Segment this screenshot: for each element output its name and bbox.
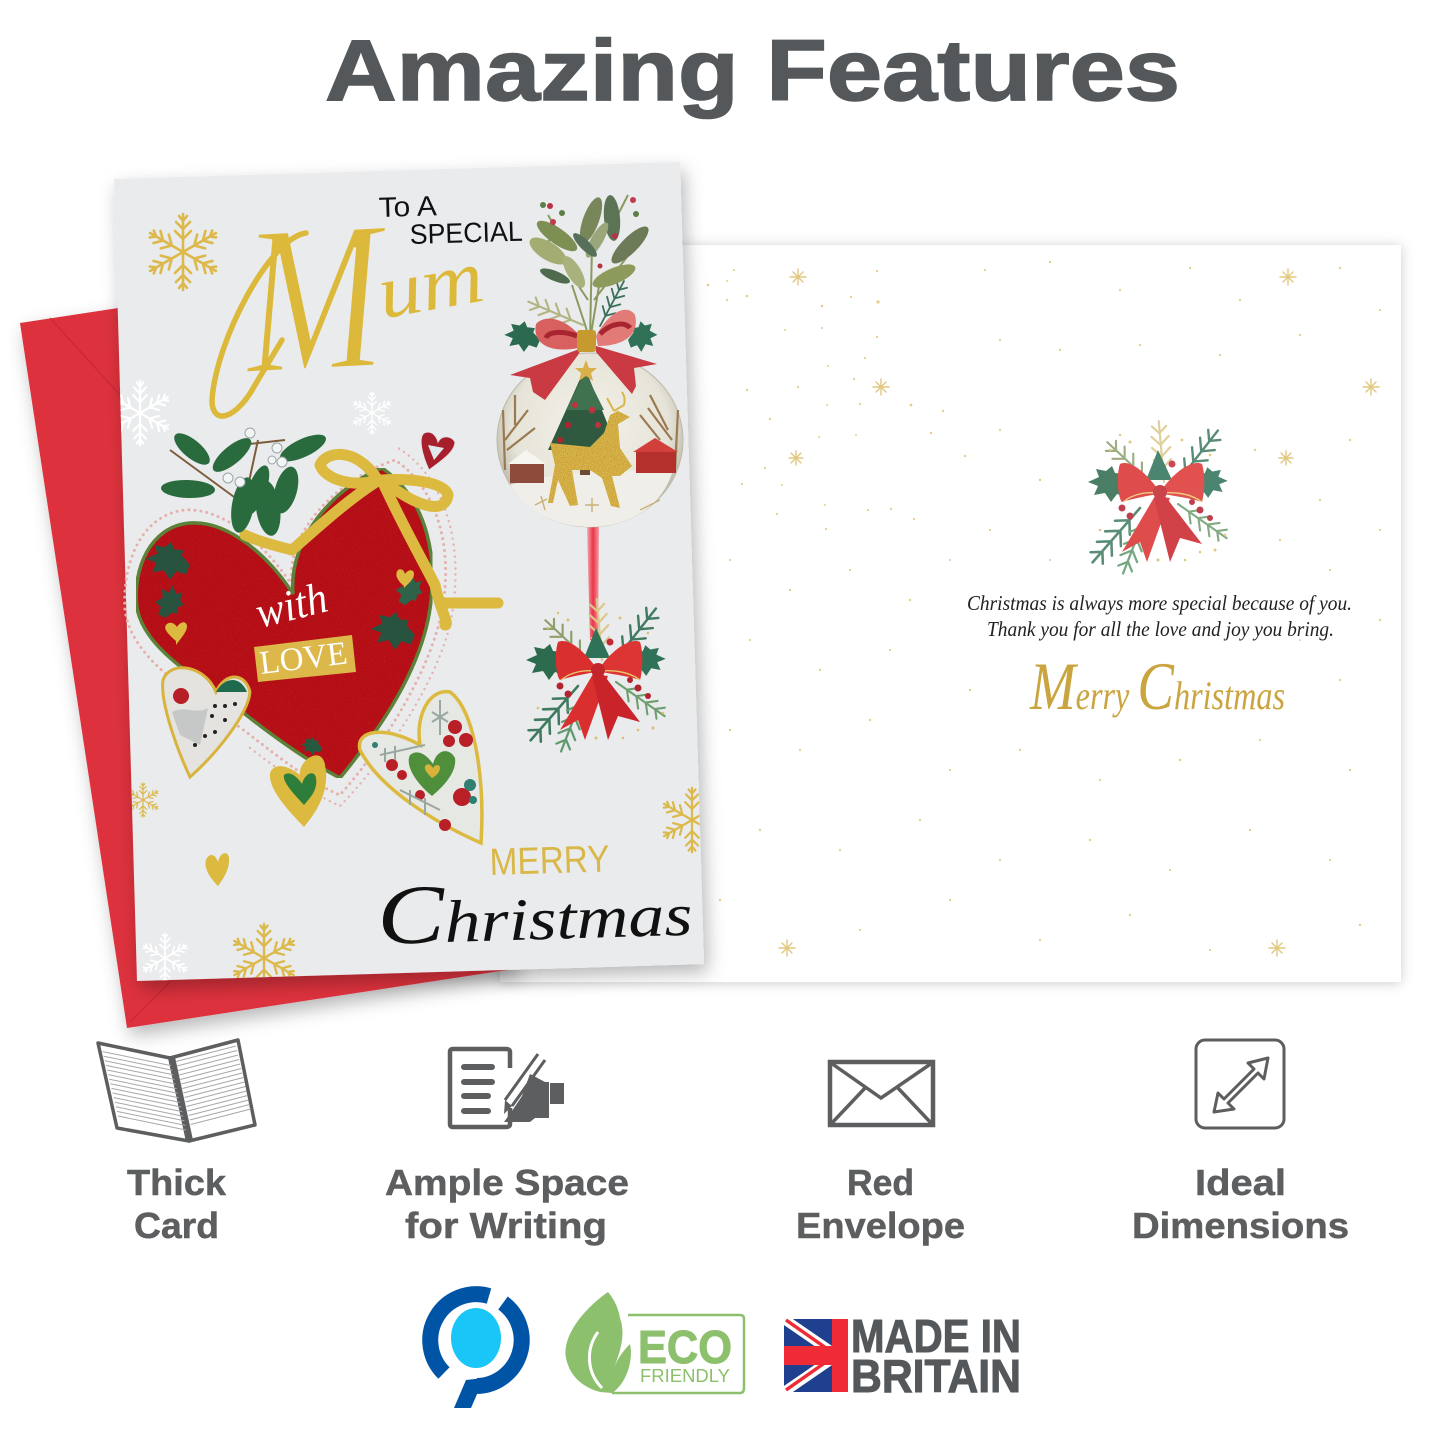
gold stars <box>779 269 1379 956</box>
made in britain text: BRITAIN <box>851 1350 1021 1402</box>
bauble bow <box>504 310 657 400</box>
small top heart <box>421 432 455 470</box>
made in britain text <box>851 1310 1021 1402</box>
gold ribbon and bow <box>245 454 498 625</box>
label: red envelope: Red <box>847 1162 914 1203</box>
feature: ideal dimensions <box>1132 1040 1349 1246</box>
To A Special text <box>378 190 523 250</box>
label: thick card <box>127 1162 227 1246</box>
label: ideal dimensions <box>1132 1162 1349 1246</box>
gold snowflakes lower <box>126 783 723 992</box>
Mum script: M <box>236 176 396 419</box>
small gold hearts <box>165 569 414 886</box>
inner verse: Thank you for all the love and joy you bring. <box>987 617 1334 641</box>
icon: envelope <box>830 1062 933 1125</box>
large red glitter heart <box>125 432 498 886</box>
white snowflakes <box>109 381 392 983</box>
ribbon from bauble to bow <box>587 527 599 640</box>
Mum script: um <box>371 234 489 335</box>
inner card page <box>500 245 1401 982</box>
bauble ornament <box>497 194 683 640</box>
label: ideal dimensions: Dimensions <box>1132 1205 1349 1246</box>
badge: eco friendly <box>566 1292 744 1393</box>
inner bow illustration <box>1088 419 1228 575</box>
Merry text: MERRY <box>489 838 610 884</box>
label: red envelope <box>796 1162 965 1246</box>
label: ample space <box>385 1162 629 1246</box>
Christmas script: Christmas <box>376 861 693 963</box>
greeting card front <box>109 162 723 992</box>
love label: LOVE <box>258 635 349 682</box>
inner verse: Christmas is always more special because of you. <box>967 591 1352 615</box>
To A Special text: To A <box>378 190 437 223</box>
icon: resize arrow <box>1196 1040 1284 1128</box>
title: Amazing Features <box>325 23 1180 119</box>
red envelope <box>20 307 520 1028</box>
snowflakes clipped to card <box>109 214 723 992</box>
gold speckle background <box>707 261 1381 951</box>
made in britain text: MADE IN <box>851 1310 1021 1362</box>
feature: red envelope <box>796 1062 965 1246</box>
label: ample space: for Writing <box>405 1205 607 1246</box>
bauble body <box>497 353 683 527</box>
label: red envelope: Envelope <box>796 1205 965 1246</box>
inner verse <box>967 591 1352 641</box>
friendly wordmark: FRIENDLY <box>640 1366 730 1386</box>
label: ample space: Ample Space <box>385 1162 629 1203</box>
foliage above bauble <box>525 194 653 340</box>
bauble scene <box>503 360 678 527</box>
label: ideal dimensions: Ideal <box>1195 1162 1286 1203</box>
lower bow with ribbon <box>526 597 666 753</box>
label: thick card: Card <box>134 1205 219 1246</box>
patterned heart left <box>163 668 250 777</box>
feature: thick card <box>98 1040 255 1246</box>
icon: writing hand <box>450 1049 564 1127</box>
with love text: with <box>251 573 332 638</box>
small green gold heart <box>270 737 326 827</box>
mistletoe <box>161 428 329 537</box>
pink dotted halo <box>125 448 456 806</box>
label: thick card: Thick <box>127 1162 227 1203</box>
icon: union flag <box>784 1319 848 1392</box>
gold reindeer <box>548 411 632 508</box>
holly on heart <box>146 542 190 580</box>
feature: ample space <box>385 1049 629 1246</box>
badge: blue circular logo <box>430 1294 522 1408</box>
badge: made in britain <box>784 1310 1021 1402</box>
patterned heart right <box>359 692 482 843</box>
icon: open card <box>98 1040 255 1142</box>
Mum flourish <box>212 233 306 416</box>
Mum script <box>212 176 489 419</box>
eco wordmark: ECO <box>638 1321 732 1373</box>
To A Special text: SPECIAL <box>409 216 523 250</box>
gold snowflake top left <box>146 214 220 290</box>
inner Merry Christmas script: Merry Christmas <box>1029 648 1285 724</box>
